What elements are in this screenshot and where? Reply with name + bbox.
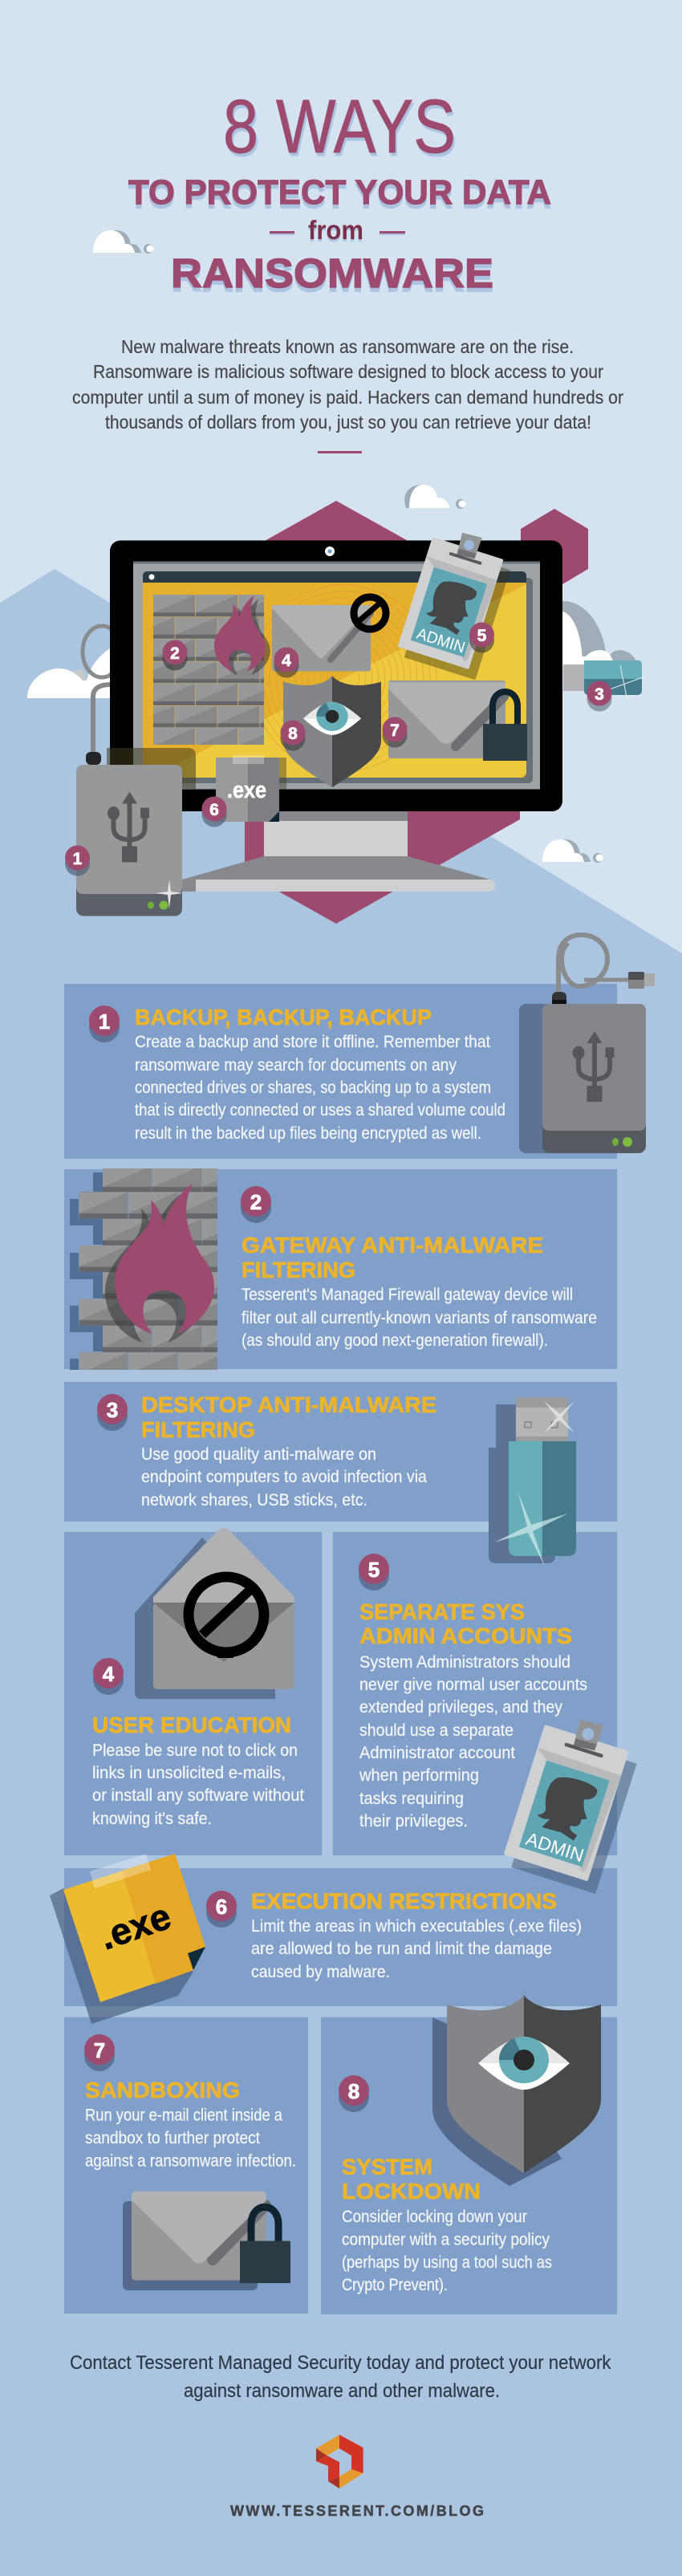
body 5: never give normal user accounts [359,1676,587,1694]
body 8: (perhaps by using a tool such as [342,2253,552,2272]
exe file illustration: .exe [94,1895,176,1957]
body 8 [342,2208,552,2294]
usb stick hero [563,660,645,701]
marker 3 [97,1394,128,1431]
exe file hero [216,755,279,822]
body 5: extended privileges, and they [359,1698,562,1717]
panel 2 content [70,1168,597,1370]
hard drive hero [76,752,183,916]
marker 1: 1 [99,1010,110,1034]
id badge on screen: ADMIN [414,625,467,657]
envelope illustration [135,1528,294,1699]
heading 8 [342,2154,481,2204]
marker 7: 7 [94,2038,105,2062]
panel 4 background [64,1532,322,1855]
shield on screen [283,676,381,787]
heading 7: SANDBOXING [85,2078,240,2103]
hero illustration [27,485,645,924]
locked envelope illustration [123,2191,290,2290]
marker 7: 7 [390,721,400,740]
marker 2 [162,640,188,671]
marker 1: 1 [73,850,83,868]
heading 6: EXECUTION RESTRICTIONS [251,1889,557,1913]
body 2: filter out all currently-known variants of ransomware [242,1309,597,1327]
panel 6 background [64,1868,617,2006]
hard drive illustration [519,935,655,1153]
marker 2 [241,1186,271,1223]
panel 5 background [333,1532,617,1855]
intro paragraph: computer until a sum of money is paid. Hackers can demand hundreds or [72,387,623,408]
hero number markers [65,623,611,876]
background mountain [0,569,682,2576]
monitor overlays [107,748,286,790]
marker 4 [274,647,298,677]
body 4: links in unsolicited e-mails, [92,1764,286,1782]
marker 2: 2 [170,644,180,663]
large hexagon [245,501,520,924]
panel 6 content [50,1854,582,2024]
exe file illustration [50,1854,205,2024]
body 8: Consider locking down your [342,2208,527,2226]
panel 7 content [84,2034,296,2290]
marker 4: 4 [282,652,291,670]
panel 8 background [321,2017,617,2314]
heading 5: SEPARATE SYS [359,1599,525,1624]
body 1: result in the backed up files being encrypted as well. [135,1124,481,1143]
monitor [110,541,562,811]
marker 8: 8 [348,2079,359,2103]
body 7 [85,2106,296,2170]
body 5 [359,1653,587,1830]
marker 4: 4 [103,1662,115,1686]
exe file hero: .exe [227,778,266,803]
monitor stand [182,811,495,892]
marker 3: 3 [107,1398,118,1422]
body 7: sandbox to further protect [85,2129,260,2147]
heading 5 [359,1599,572,1648]
title: from [308,215,363,245]
heading 3 [141,1392,436,1442]
panel 1 content [89,935,655,1153]
body 3: endpoint computers to avoid infection via [141,1468,427,1486]
body 1: Create a backup and store it offline. Remember that [135,1033,490,1051]
intro paragraph: thousands of dollars from you, just so you can retrieve your data! [105,412,591,433]
heading 2 [242,1233,543,1282]
flame illustration [105,1184,214,1343]
intro paragraph: New malware threats known as ransomware are on the rise. [121,336,574,357]
closing call to action: against ransomware and other malware. [184,2380,500,2402]
marker 6 [202,796,226,827]
marker 1 [89,1006,120,1042]
body 4: or install any software without [92,1786,304,1805]
cloud behind usb stick [562,601,637,666]
body 4 [92,1741,304,1828]
marker 3: 3 [595,685,604,704]
id badge illustration, panel 5 [504,1709,637,1894]
body 5: tasks requiring [359,1790,464,1808]
shield illustration [447,1995,601,2173]
cloud left with cable ring [27,626,121,753]
marker 8 [339,2075,369,2112]
heading 3: DESKTOP ANTI-MALWARE [141,1392,436,1417]
body 6: are allowed to be run and limit the damage [251,1940,552,1958]
title [128,84,551,296]
usb stick illustration, panel 3 [489,1397,576,1566]
body 6 [251,1917,582,1981]
closing call to action: Contact Tesserent Managed Security today and protect your network [70,2352,611,2374]
panel 5 content [359,1554,587,1830]
marker 5: 5 [368,1558,380,1582]
envelope with padlock on screen [388,681,527,761]
intro paragraph: Ransomware is malicious software designed to block access to your [93,361,603,382]
flame on screen [214,595,270,675]
marker 5 [359,1554,389,1591]
body 6: Limit the areas in which executables (.exe files) [251,1917,582,1936]
body 5: their privileges. [359,1812,468,1830]
body 8: computer with a security policy [342,2231,550,2249]
body 6: caused by malware. [251,1963,390,1981]
heading 8: LOCKDOWN [342,2179,481,2204]
body 4: Please be sure not to click on [92,1741,298,1760]
panel 7 background [64,2017,308,2314]
marker 8 [281,721,305,751]
heading 1: BACKUP, BACKUP, BACKUP [135,1005,432,1030]
intro paragraph [72,336,623,433]
brick wall illustration [70,1168,217,1370]
marker 6 [206,1891,237,1928]
body 5: should use a separate [359,1721,514,1740]
marker 4 [93,1658,124,1695]
marker 6: 6 [209,801,219,819]
title: TO PROTECT YOUR DATA [128,173,551,212]
heading 4: USER EDUCATION [92,1713,291,1737]
closing call to action [70,2352,611,2402]
brick wall on screen [153,595,264,745]
panel 1 background [64,984,617,1159]
heading 2: GATEWAY ANTI-MALWARE [242,1233,543,1258]
logo [316,2435,363,2489]
heading 5: ADMIN ACCOUNTS [359,1623,572,1648]
body 5: Administrator account [359,1744,515,1762]
id badge illustration, panel 5: ADMIN [523,1828,587,1866]
body 3 [141,1445,427,1509]
heading 3: FILTERING [141,1417,255,1442]
cloud right lower [542,839,603,863]
panel 2 background [64,1169,617,1369]
id badge on screen [398,523,510,680]
marker 1 [65,846,90,876]
heading 2: FILTERING [242,1258,355,1282]
body 7: Run your e-mail client inside a [85,2106,282,2125]
body 3: network shares, USB sticks, etc. [141,1491,367,1509]
marker 3 [587,681,611,711]
intro rule [318,451,362,453]
cloud top left [93,230,154,254]
panel 8 content [339,1995,601,2294]
panel 3 background [64,1382,617,1522]
panel 3 content [97,1392,436,1509]
body 1: connected drives or shares, so backing up to a system [135,1079,491,1097]
body 2: (as should any good next-generation firewall). [242,1331,548,1350]
body 8: Crypto Prevent). [342,2276,448,2294]
small hexagon [521,509,588,589]
concentric rings [250,585,436,771]
body 1: that is directly connected or uses a shared volume could [135,1101,505,1119]
body 7: against a ransomware infection. [85,2152,296,2170]
title: 8 WAYS [223,84,456,169]
body 2: Tesserent's Managed Firewall gateway device will [242,1286,573,1304]
heading 8: SYSTEM [342,2154,432,2180]
cloud above monitor [404,485,465,509]
body 5: System Administrators should [359,1653,570,1672]
marker 7 [382,717,408,748]
marker 7 [84,2034,115,2071]
envelope with block sign [272,597,386,671]
marker 2: 2 [250,1190,262,1214]
marker 5: 5 [477,627,487,645]
panel 4 content [92,1528,304,1828]
website url: WWW.TESSERENT.COM/BLOG [230,2503,484,2519]
marker 8: 8 [288,725,298,743]
body 1 [135,1033,505,1143]
body 2 [242,1286,597,1350]
shield shadow [432,2017,562,2186]
marker 5 [469,623,494,653]
body 5: when performing [359,1766,479,1785]
title: RANSOMWARE [171,250,493,296]
marker 6: 6 [216,1895,227,1919]
body 1: ransomware may search for documents on any [135,1056,457,1075]
body 4: knowing it's safe. [92,1810,212,1828]
body 3: Use good quality anti-malware on [141,1445,376,1464]
